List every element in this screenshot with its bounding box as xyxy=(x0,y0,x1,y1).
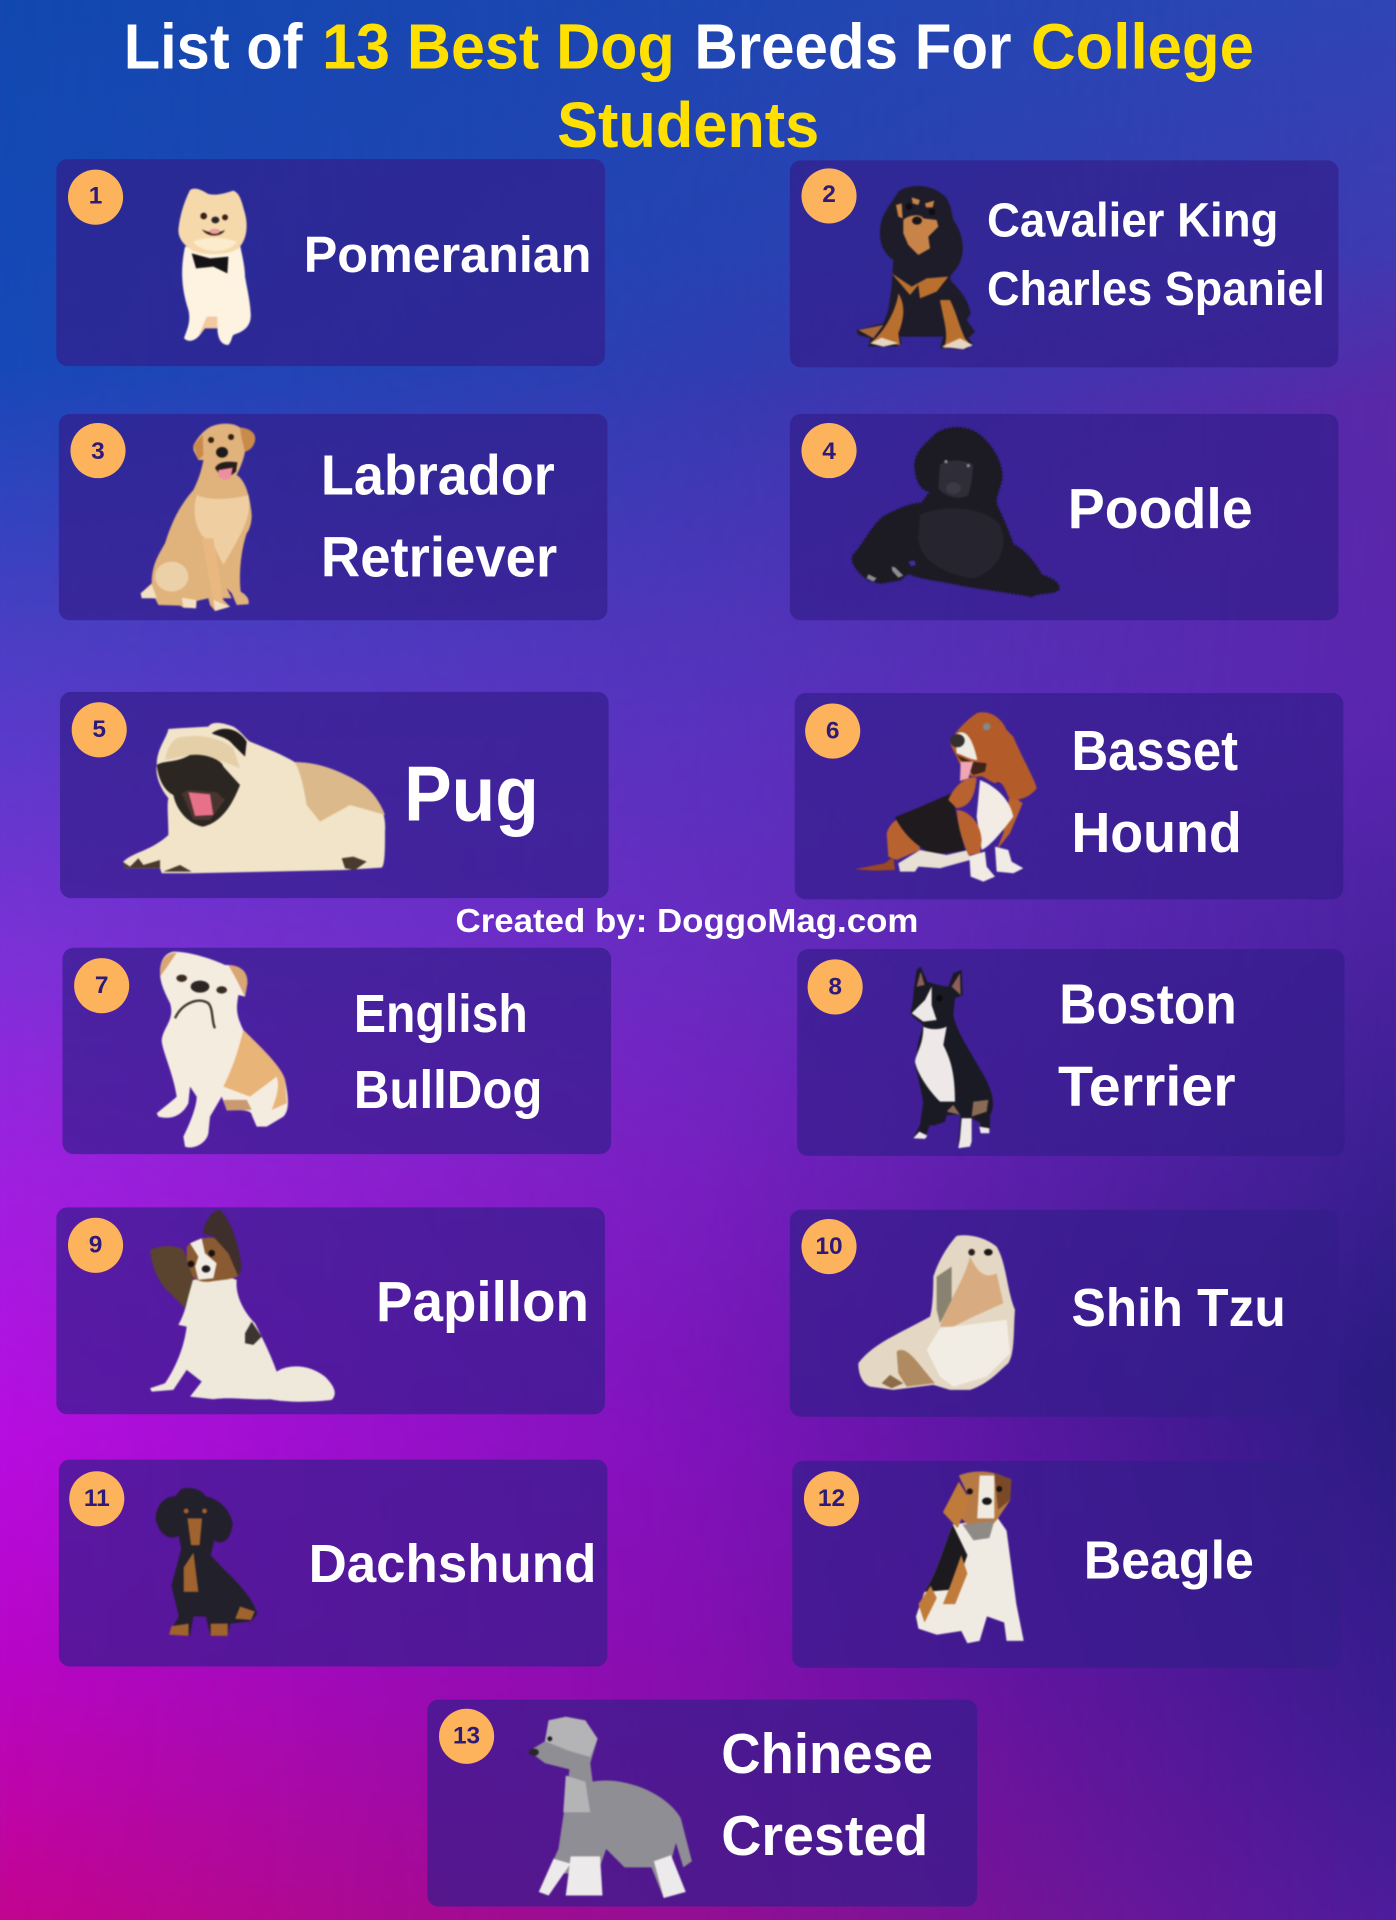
panel: 7 English BullDog: 7 xyxy=(95,972,108,999)
panel: 10 Shih Tzu xyxy=(790,1210,1338,1417)
breed name: Papillon xyxy=(376,1270,589,1333)
panel: 9 Papillon xyxy=(56,1207,605,1414)
breed name xyxy=(321,444,557,589)
icon: labrador dog xyxy=(141,424,255,611)
icon: pomeranian dog xyxy=(178,189,251,345)
panel: 6 Basset Hound: 6 xyxy=(826,717,839,744)
panel: 1 Pomeranian: 1 xyxy=(89,182,102,209)
panel: 12 Beagle xyxy=(792,1461,1341,1668)
panel: 4 Poodle: 4 xyxy=(822,438,836,465)
breed name: Terrier xyxy=(1058,1055,1236,1118)
breed name: Basset xyxy=(1071,719,1238,782)
panel: 13 Chinese Crested: 13 xyxy=(453,1723,480,1750)
title: Breeds For xyxy=(694,12,1011,83)
panel: 1 Pomeranian xyxy=(56,159,605,366)
icon: basset hound dog xyxy=(855,712,1037,882)
panel: 8 Boston Terrier xyxy=(797,949,1345,1156)
breed name: BullDog xyxy=(354,1060,542,1120)
breed name: Crested xyxy=(721,1804,928,1867)
panel: 4 Poodle xyxy=(790,414,1338,620)
breed name xyxy=(987,194,1325,316)
breed name: Pomeranian xyxy=(304,225,591,283)
breed name: Labrador xyxy=(321,444,555,507)
icon: shih tzu dog xyxy=(858,1235,1015,1390)
panel: 7 English BullDog xyxy=(62,948,611,1154)
breed name: English xyxy=(354,984,528,1044)
breed name: Boston xyxy=(1059,973,1237,1036)
panel: 3 Labrador Retriever xyxy=(59,414,607,620)
breed name: Retriever xyxy=(321,526,557,589)
credit line: Created by: DoggoMag.com xyxy=(456,903,918,940)
breed name: Shih Tzu xyxy=(1071,1278,1286,1338)
panel: 2 Cavalier King Charles Spaniel: 2 xyxy=(822,181,836,208)
panel: 6 Basset Hound xyxy=(795,693,1343,899)
title: Students xyxy=(557,90,819,161)
breed name: Beagle xyxy=(1084,1530,1254,1590)
panel: 3 Labrador Retriever: 3 xyxy=(91,438,105,465)
breed name: Cavalier King xyxy=(987,194,1278,247)
icon: chinese crested dog xyxy=(529,1717,692,1898)
panel: 12 Beagle: 12 xyxy=(818,1485,845,1512)
icon: cavalier spaniel dog xyxy=(857,186,975,349)
panel: 8 Boston Terrier: 8 xyxy=(828,973,842,1000)
breed name: Poodle xyxy=(1068,477,1253,540)
panel: 2 Cavalier King Charles Spaniel xyxy=(790,160,1338,367)
panel: 5 Pug: 5 xyxy=(92,716,106,743)
breed name xyxy=(1058,973,1237,1118)
panel: 11 Dachshund: 11 xyxy=(84,1485,110,1512)
breed name: Pug xyxy=(404,749,539,837)
icon: papillon dog xyxy=(150,1210,335,1402)
icon: boston terrier dog xyxy=(911,967,993,1148)
breed name xyxy=(721,1722,933,1867)
panel: 10 Shih Tzu: 10 xyxy=(815,1233,843,1260)
panel: 5 Pug xyxy=(60,692,609,898)
icon: pug dog xyxy=(123,723,385,873)
icon: poodle dog xyxy=(852,428,1059,597)
title: College xyxy=(1031,12,1254,83)
panel: 13 Chinese Crested xyxy=(427,1700,977,1907)
title xyxy=(124,12,1254,161)
breed name xyxy=(1071,719,1242,864)
breed name xyxy=(354,984,542,1120)
title: List of xyxy=(124,12,303,83)
panel: 11 Dachshund xyxy=(59,1460,607,1667)
breed name: Chinese xyxy=(721,1722,933,1785)
breed name: Charles Spaniel xyxy=(987,263,1325,316)
icon: english bulldog xyxy=(157,952,288,1147)
panel: 9 Papillon: 9 xyxy=(89,1232,102,1259)
breed name: Hound xyxy=(1071,801,1242,864)
icon: dachshund dog xyxy=(156,1488,257,1636)
icon: beagle dog xyxy=(916,1471,1024,1643)
title: 13 Best Dog xyxy=(322,12,675,83)
breed name: Dachshund xyxy=(309,1534,596,1594)
